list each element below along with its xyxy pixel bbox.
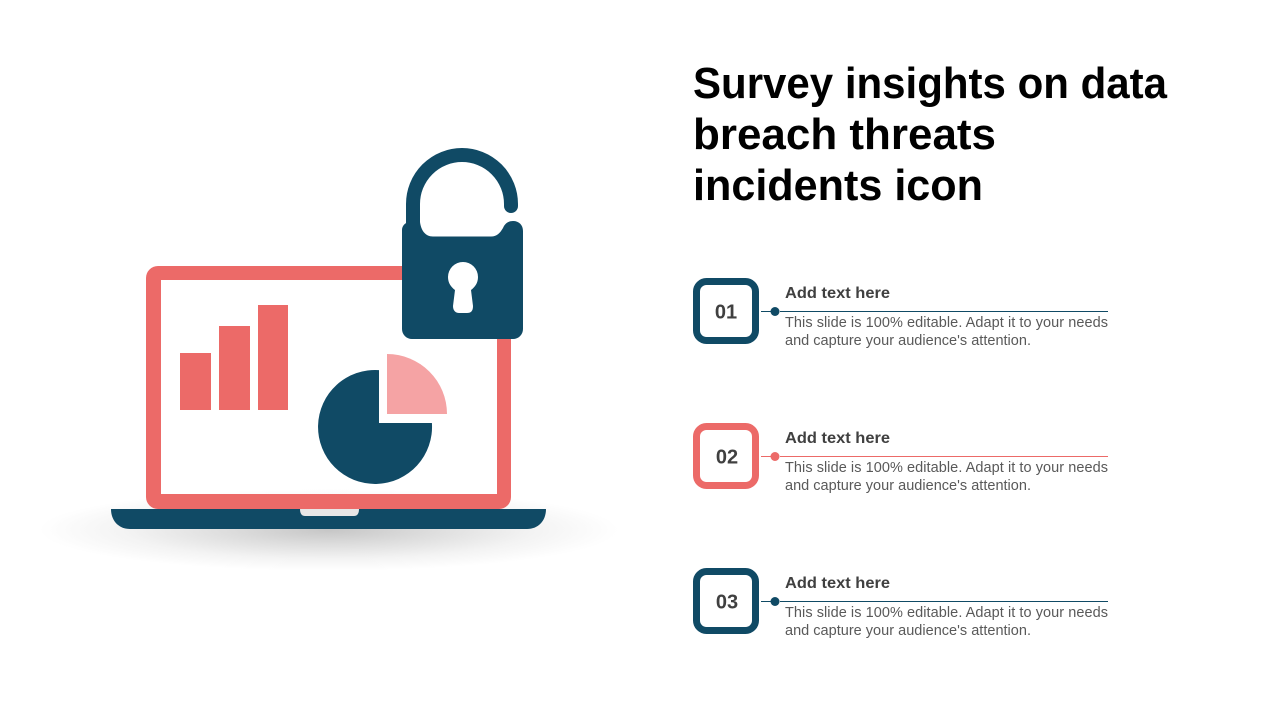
description 02: and capture your audience's attention.	[785, 478, 1031, 494]
connector 02	[761, 452, 1108, 461]
badge 03	[696, 572, 756, 630]
title: breach threats	[693, 110, 996, 159]
description 01: This slide is 100% editable. Adapt it to your needs	[785, 315, 1108, 331]
laptop notch	[300, 509, 359, 516]
item 01	[696, 282, 1112, 349]
pie chart	[318, 354, 447, 484]
padlock body	[402, 221, 523, 339]
heading 03: Add text here	[785, 575, 890, 592]
bar chart	[180, 305, 288, 410]
laptop base	[111, 509, 546, 529]
heading 02: Add text here	[785, 430, 890, 447]
padlock keyhole	[448, 262, 478, 313]
badge 01	[696, 282, 756, 340]
title: incidents icon	[693, 161, 983, 210]
laptop screen	[146, 266, 511, 509]
heading 01: Add text here	[785, 285, 890, 302]
description 03: and capture your audience's attention.	[785, 623, 1031, 639]
badge 03: 03	[716, 592, 738, 614]
description 03: This slide is 100% editable. Adapt it to your needs	[785, 605, 1108, 621]
padlock shackle	[413, 155, 511, 235]
badge 02	[696, 426, 756, 486]
title: Survey insights on data	[693, 59, 1167, 108]
badge 02: 02	[716, 446, 738, 468]
icon: padlock	[402, 155, 523, 339]
badge 01: 01	[715, 302, 737, 324]
laptop shadow	[39, 489, 619, 571]
description 01: and capture your audience's attention.	[785, 333, 1031, 349]
connector 03	[761, 597, 1108, 606]
description 02: This slide is 100% editable. Adapt it to your needs	[785, 460, 1108, 476]
item 02	[696, 426, 1112, 494]
item 03	[696, 572, 1112, 639]
illustration: laptop with padlock	[39, 155, 619, 571]
connector 01	[761, 307, 1108, 316]
